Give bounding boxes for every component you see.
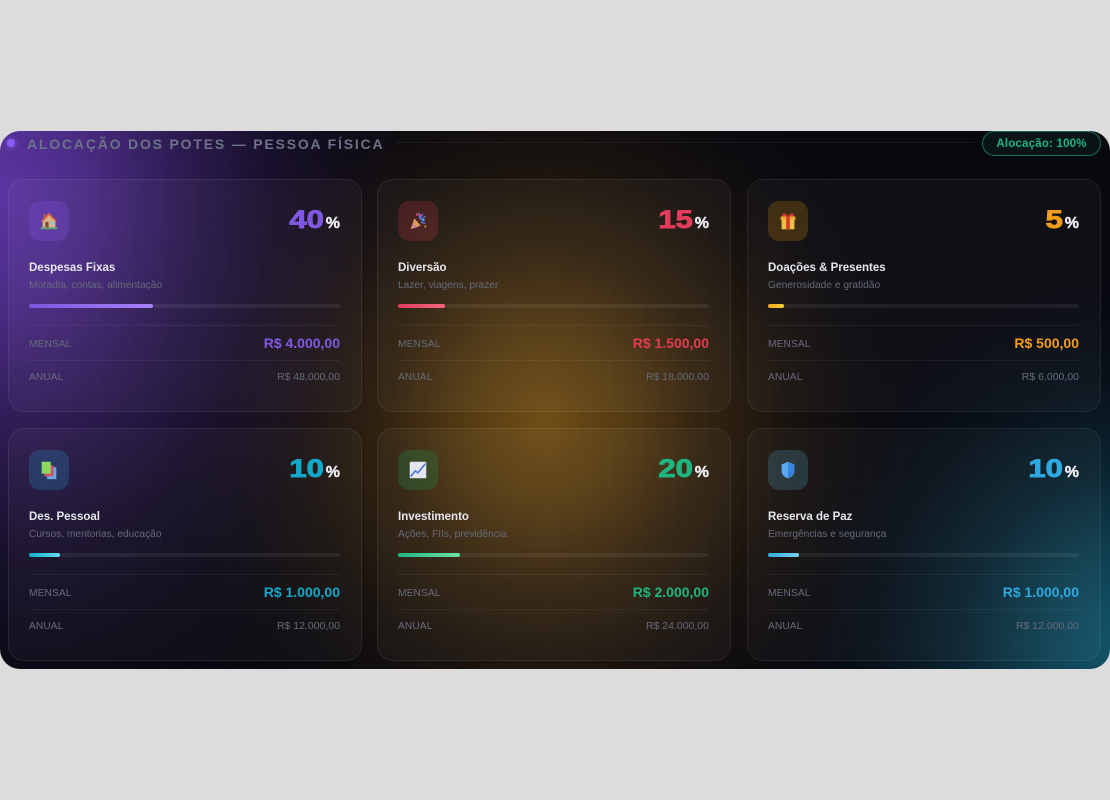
- annual value: R$ 12.000,00: [277, 620, 340, 632]
- percentage: [289, 455, 340, 483]
- panel: Reserva de Paz: [747, 428, 1101, 661]
- description: Cursos, mentorias, educação: [29, 529, 162, 540]
- percentage: [658, 206, 709, 234]
- description: Lazer, viagens, prazer: [398, 280, 498, 291]
- percentage: %: [326, 215, 340, 232]
- monthly label: MENSAL: [768, 588, 810, 599]
- percentage: %: [1065, 215, 1079, 232]
- panel: Diversão: [377, 179, 731, 412]
- progress bar: [398, 553, 709, 557]
- percentage: 10: [289, 455, 324, 483]
- percentage: [1046, 206, 1079, 234]
- name: Investimento: [398, 511, 469, 523]
- percentage: [289, 206, 340, 234]
- progress bar: [29, 553, 340, 557]
- monthly value: R$ 2.000,00: [633, 584, 709, 600]
- description: Ações, FIIs, previdência: [398, 529, 507, 540]
- monthly label: MENSAL: [29, 588, 72, 599]
- monthly value: R$ 1.500,00: [633, 335, 709, 351]
- monthly value: R$ 1.000,00: [264, 584, 340, 600]
- name: Des. Pessoal: [29, 511, 100, 523]
- name: Diversão: [398, 262, 447, 274]
- annual label: ANUAL: [398, 621, 432, 632]
- panel: Doações & Presentes: [747, 179, 1101, 412]
- allocation badge: Alocação: 100%: [996, 138, 1087, 150]
- icon: house: [29, 201, 69, 241]
- icon: books: [29, 450, 69, 490]
- percentage: 20: [658, 455, 693, 483]
- name: Reserva de Paz: [768, 511, 852, 523]
- percentage: 5: [1046, 206, 1063, 234]
- header dot: [7, 139, 15, 147]
- annual value: R$ 24.000,00: [646, 620, 709, 632]
- name: Doações & Presentes: [768, 262, 886, 274]
- description: Generosidade e gratidão: [768, 280, 880, 291]
- description: Emergências e segurança: [768, 529, 886, 540]
- annual value: R$ 18.000,00: [646, 371, 709, 383]
- dashboard panel: [0, 131, 1110, 669]
- title: ALOCAÇÃO DOS POTES — PESSOA FÍSICA: [27, 136, 384, 152]
- monthly label: MENSAL: [29, 339, 72, 350]
- panel: Des. Pessoal: [8, 428, 362, 661]
- icon: chart: [398, 450, 438, 490]
- name: Despesas Fixas: [29, 262, 115, 274]
- percentage: %: [695, 215, 709, 232]
- annual label: ANUAL: [768, 621, 802, 632]
- monthly label: MENSAL: [398, 588, 440, 599]
- icon: party popper: [398, 201, 438, 241]
- allocation badge: [982, 131, 1101, 156]
- monthly value: R$ 500,00: [1014, 335, 1079, 351]
- annual label: ANUAL: [29, 621, 63, 632]
- percentage: %: [1065, 464, 1079, 481]
- progress bar: [768, 304, 1079, 308]
- panel: Investimento: [377, 428, 731, 661]
- annual label: ANUAL: [768, 372, 802, 383]
- progress bar: [29, 304, 340, 308]
- percentage: 10: [1028, 455, 1063, 483]
- monthly value: R$ 4.000,00: [264, 335, 340, 351]
- percentage: [658, 455, 709, 483]
- annual value: R$ 48.000,00: [277, 371, 340, 383]
- progress bar: [398, 304, 709, 308]
- annual label: ANUAL: [398, 372, 432, 383]
- percentage: [1028, 455, 1079, 483]
- icon: gift: [768, 201, 808, 241]
- annual label: ANUAL: [29, 372, 63, 383]
- monthly label: MENSAL: [398, 339, 440, 350]
- percentage: 15: [658, 206, 693, 234]
- icon: shield: [768, 450, 808, 490]
- percentage: 40: [289, 206, 324, 234]
- description: Moradia, contas, alimentação: [29, 280, 162, 291]
- annual value: R$ 6.000,00: [1022, 371, 1079, 383]
- monthly label: MENSAL: [768, 339, 810, 350]
- progress bar: [768, 553, 1079, 557]
- panel: Despesas Fixas: [8, 179, 362, 412]
- percentage: %: [695, 464, 709, 481]
- annual value: R$ 12.000,00: [1016, 620, 1079, 632]
- monthly value: R$ 1.000,00: [1003, 584, 1079, 600]
- percentage: %: [326, 464, 340, 481]
